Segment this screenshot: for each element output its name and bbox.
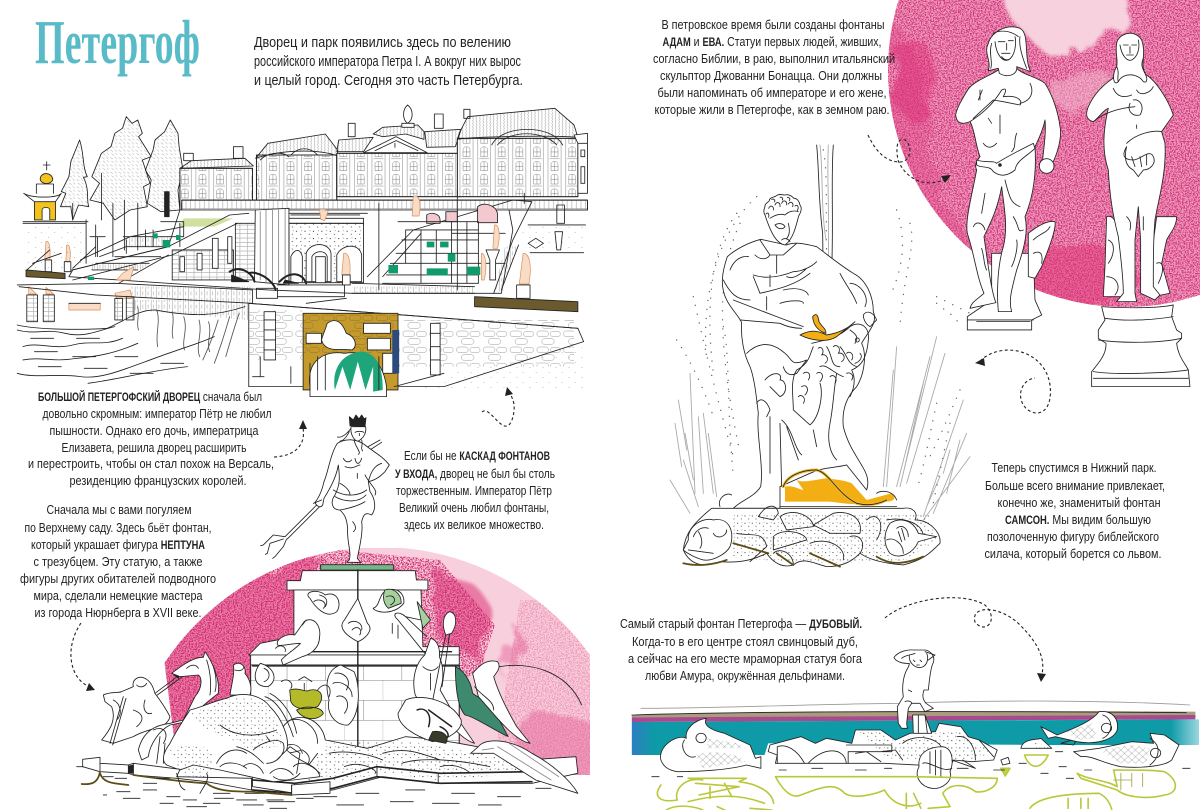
water ripples: [214, 788, 551, 805]
cascade text: здесь их великое множество.: [404, 517, 544, 532]
pink watercolor circle: lower left: [164, 548, 590, 775]
arrow to palace: [274, 420, 307, 457]
Neptune text: с трезубцем. Эту статую, а также: [34, 554, 202, 569]
Samson text: [984, 460, 1165, 561]
cascade text: [395, 448, 555, 532]
palace facade: [180, 105, 587, 210]
Neptune statue: [261, 415, 389, 562]
Neptune text: который украшает фигура НЕПТУНА: [31, 537, 205, 552]
Adam and Eve text: скульптор Джованни Бонацца. Они должны: [660, 68, 882, 83]
title: Петергоф: [35, 9, 200, 77]
palace description text: и перестроить, чтобы он стал похож на Версаль,: [28, 456, 274, 471]
Adam statue: [956, 27, 1061, 330]
Neptune text: мира, сделали немецкие мастера: [34, 588, 203, 603]
Cupid statue: [894, 650, 935, 733]
Samson text: силача, который борется со львом.: [984, 546, 1162, 561]
arrow to Adam and Eve: [868, 135, 951, 183]
palace description text: Елизавета, решила дворец расширить: [62, 440, 247, 455]
lime reflections: [652, 752, 1190, 810]
Neptune text: [20, 502, 216, 620]
seated figure on pedestal: [276, 620, 320, 665]
intro text: [254, 34, 523, 89]
arrow from Samson text: [975, 350, 1050, 413]
Neptune fountain: [214, 565, 582, 805]
Neptune text: из города Нюрнберга в XVII веке.: [34, 605, 202, 620]
oak fountain text: Когда-то в его центре стоял свинцовый дуб,: [632, 634, 858, 649]
figure behind monster: [230, 663, 251, 695]
cascade text: У ВХОДА, дворец не был бы столь: [395, 466, 555, 481]
oak fountain text: [620, 616, 863, 683]
Samson text: Теперь спустимся в Нижний парк.: [992, 460, 1156, 475]
spray: [670, 197, 970, 520]
Samson figure and lion: [722, 194, 877, 508]
statues: Adam and Eve: [956, 27, 1190, 387]
lawn: [23, 205, 586, 312]
wall of stones and grotto: [249, 303, 586, 397]
Adam and Eve text: АДАМ и ЕВА. Статуи первых людей, живших,: [662, 34, 882, 49]
Samson text: Больше всего внимание привлекает,: [985, 478, 1165, 493]
Adam and Eve text: которые жили в Петергофе, как в земном раю.: [654, 102, 890, 117]
rider: [102, 671, 183, 745]
Eve statue: [1087, 33, 1190, 387]
Neptune text: фигуры других обитателей подводного: [20, 571, 216, 586]
right figure with trident: [395, 612, 475, 743]
dolphins: [660, 711, 1179, 789]
cascade text: торжественным. Император Пётр: [396, 483, 552, 498]
Neptune text: по Верхнему саду. Здесь бьёт фонтан,: [24, 520, 212, 535]
arrow to Neptune fountain: [71, 623, 95, 691]
Adam and Eve text: [653, 17, 895, 117]
intro text: и целый город. Сегодня это часть Петербурга.: [254, 72, 523, 89]
cascade text: Великий очень любил фонтаны,: [399, 500, 549, 515]
water jet: [817, 145, 833, 328]
Samson text: САМСОН. Мы видим большую: [1005, 512, 1151, 527]
rocks: [768, 723, 1077, 776]
arrow to cascade: [482, 387, 514, 426]
palace description text: пышности. Однако его дочь, императрица: [50, 423, 259, 438]
lower retaining wall and water: [17, 283, 253, 383]
center and right rocks: [253, 717, 578, 793]
pink watercolor circle: upper right: [880, 0, 1200, 320]
gilded details: [780, 315, 897, 507]
Oak fountain scene: [632, 701, 1199, 810]
central grotto facade and jet: [230, 208, 367, 303]
Neptune fountain: left group with rider, horse and sea monster: [77, 652, 330, 808]
intro text: российского императора Петра I. А вокруг них вырос: [254, 53, 521, 70]
sea monster and rock: [163, 693, 320, 782]
oak fountain text: Самый старый фонтан Петергофа — ДУБОВЫЙ.: [620, 616, 862, 631]
chapel with yellow walls: [23, 162, 88, 222]
coloured water bands: [632, 701, 1199, 755]
green sea creature: [455, 661, 582, 793]
Adam and Eve text: были напоминать об императоре и его жене,: [658, 85, 886, 100]
palace description text: довольно скромным: император Пётр не любил: [42, 406, 272, 421]
terraces and stairs: [65, 190, 532, 294]
oak fountain text: а сейчас на его месте мраморная статуя бога: [628, 651, 863, 666]
green apple ornament: [281, 677, 330, 719]
Samson fountain: [670, 145, 970, 567]
Samson text: конечно же, знаменитый фонтан: [998, 495, 1160, 510]
horse: [138, 652, 219, 763]
illustration: Grand Palace and Grand Cascade: [17, 105, 587, 397]
palace description text: резиденцию французских королей.: [70, 473, 246, 488]
palace description text: БОЛЬШОЙ ПЕТЕРГОФСКИЙ ДВОРЕЦ сначала был: [38, 389, 262, 404]
palace description text: [28, 389, 274, 488]
arrow to oak fountain: [885, 598, 1046, 682]
Adam and Eve text: согласно Библии, в раю, выполнил итальянский: [653, 51, 895, 66]
gilded statues: [27, 196, 530, 310]
fir trees: [60, 117, 183, 257]
cascade text: Если бы не КАСКАД ФОНТАНОВ: [404, 448, 550, 463]
Samson text: позолоченную фигуру библейского: [987, 529, 1159, 544]
intro text: Дворец и парк появились здесь по велению: [254, 34, 511, 51]
pedestal: [249, 565, 459, 753]
Neptune text: Сначала мы с вами погуляем: [46, 502, 192, 517]
oak fountain text: любви Амура, окружённая дельфинами.: [645, 668, 845, 683]
rocks and dolphins: [683, 494, 940, 567]
stone slab: [77, 757, 330, 808]
Adam and Eve text: В петровское время были созданы фонтаны: [662, 17, 884, 32]
